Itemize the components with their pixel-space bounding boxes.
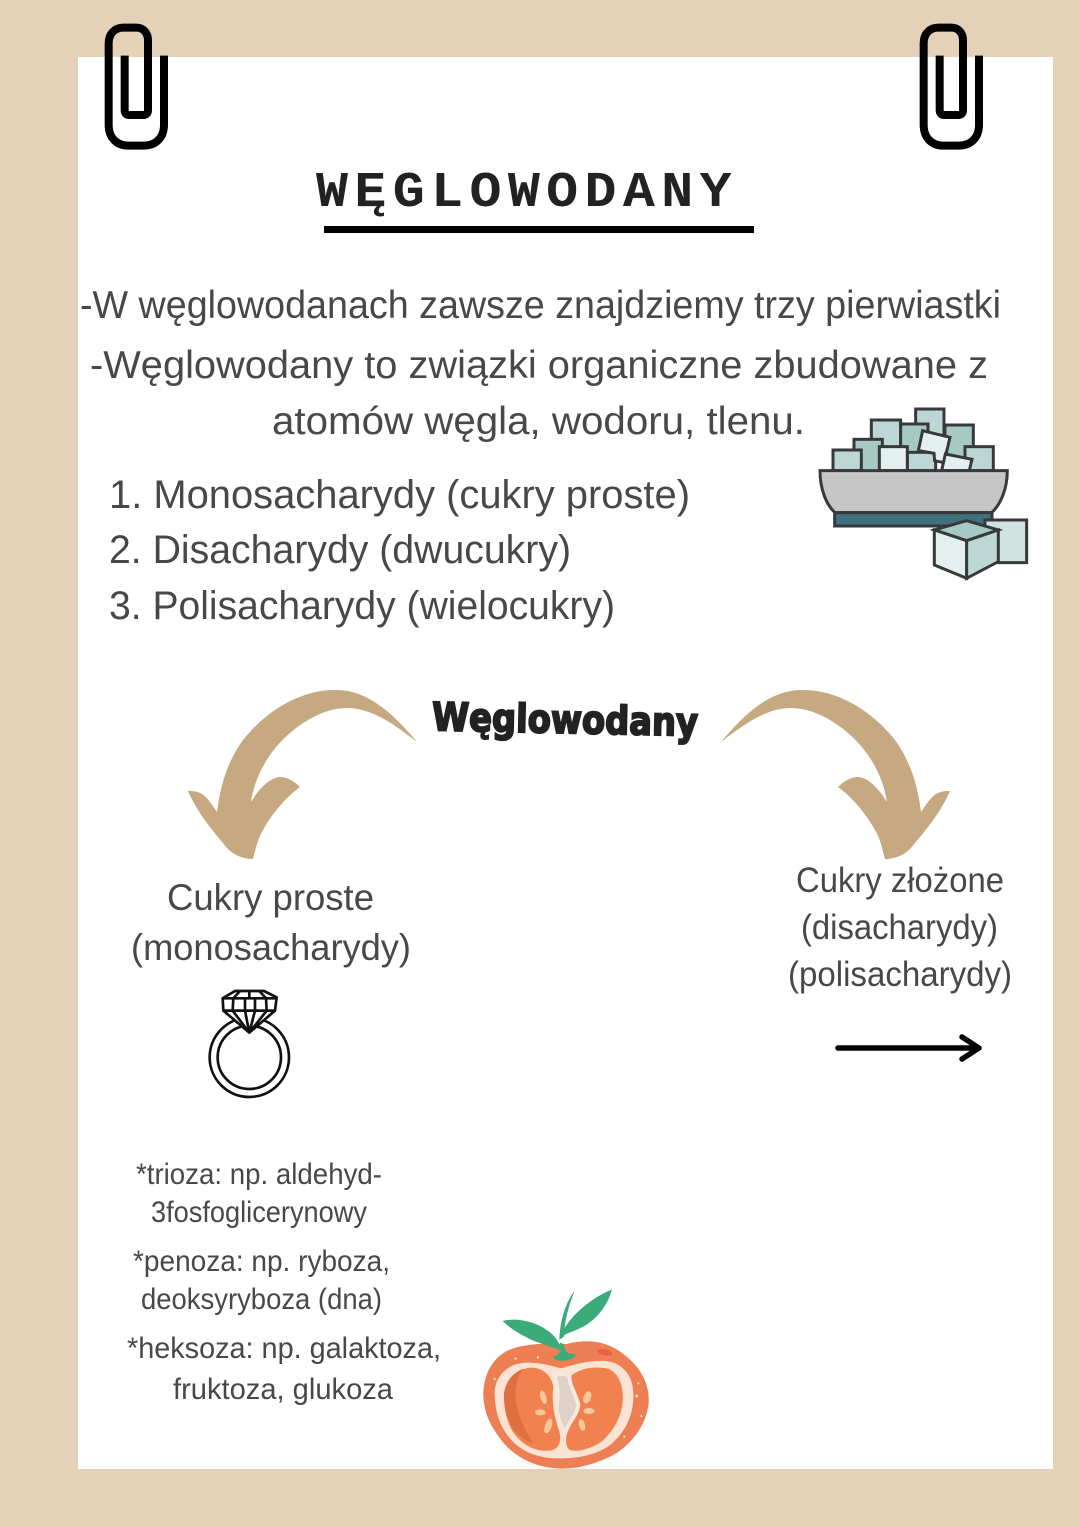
text block: monosaccharide examples [127, 1158, 441, 1406]
text block: monosaccharide examples: deoksyryboza (dna) [141, 1283, 382, 1316]
text block: numbered list: 2. Disacharydy (dwucukry) [109, 528, 571, 572]
text block: monosaccharide examples: 3fosfoglicerynowy [151, 1196, 367, 1229]
text block: numbered list: 1. Monosacharydy (cukry proste) [109, 473, 690, 517]
text block: numbered list: 3. Polisacharydy (wielocukry) [109, 584, 615, 628]
text block: complex sugars: Cukry złożone [796, 861, 1004, 900]
text block: simple sugars: (monosacharydy) [131, 927, 411, 968]
heading: central label: Węglowodany [432, 695, 698, 746]
text block: simple sugars [131, 877, 411, 968]
arrow: black right arrow [838, 1037, 979, 1059]
text block: introduction: atomów węgla, wodoru, tlenu. [272, 400, 805, 443]
title: WĘGLOWODANY [316, 165, 738, 222]
text block: introduction: -W węglowodanach zawsze znajdziemy trzy pierwiastki [80, 284, 1001, 327]
text block: simple sugars: Cukry proste [167, 877, 374, 918]
arrow: curved arrow to the left [188, 690, 417, 859]
text block: numbered list [109, 473, 690, 628]
arrow: curved arrow to the right [721, 690, 950, 859]
text block: complex sugars: (polisacharydy) [788, 955, 1012, 994]
text block: monosaccharide examples: *trioza: np. aldehyd- [136, 1158, 382, 1191]
icon: halved tomato [483, 1289, 649, 1469]
icon: diamond ring [210, 991, 289, 1097]
icon: right paperclip [924, 28, 979, 146]
text block: introduction [80, 284, 1001, 443]
text block: monosaccharide examples: *penoza: np. ryboza, [133, 1245, 390, 1278]
text block: complex sugars: (disacharydy) [801, 908, 998, 947]
text block: introduction: -Węglowodany to związki organiczne zbudowane z [90, 344, 988, 387]
text block: complex sugars [788, 861, 1012, 994]
text block: monosaccharide examples: fruktoza, glukoza [173, 1373, 394, 1406]
icon: left paperclip [109, 28, 164, 146]
title underline [324, 226, 754, 233]
text block: monosaccharide examples: *heksoza: np. galaktoza, [127, 1332, 441, 1365]
icon: sugar bowl with cubes [820, 409, 1027, 578]
